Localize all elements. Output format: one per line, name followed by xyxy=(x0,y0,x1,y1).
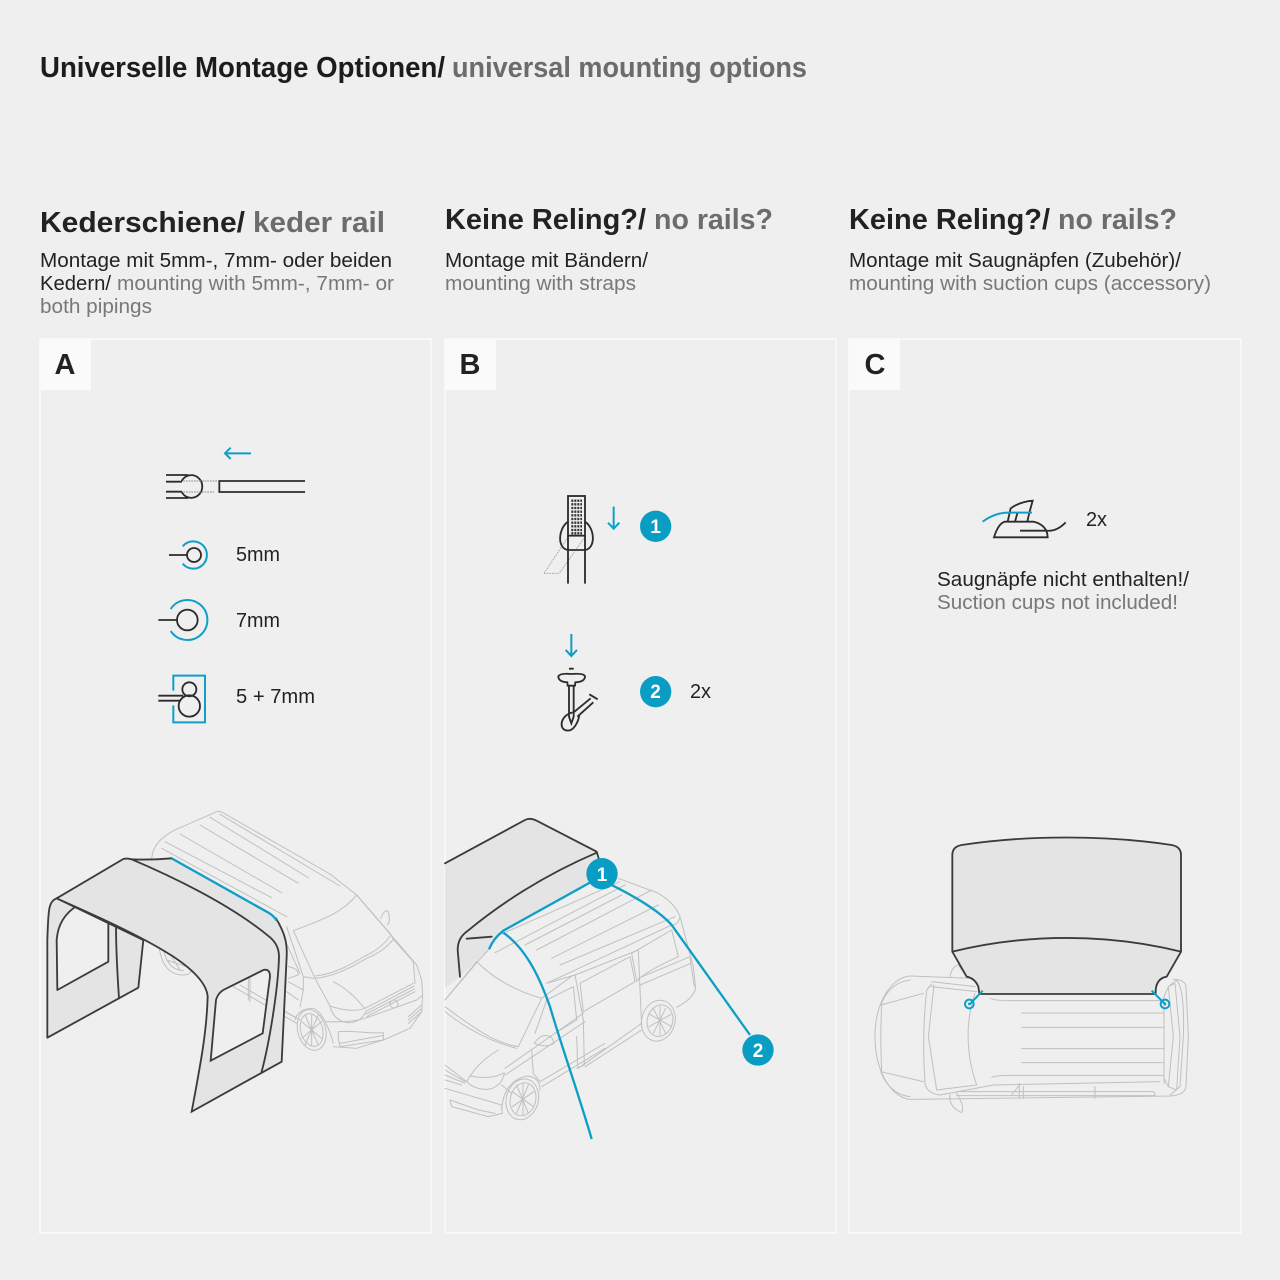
icon: peg xyxy=(558,669,598,731)
illustration: van with awning xyxy=(47,811,423,1112)
text block: keder rail description: Kedern/ xyxy=(40,273,111,295)
badge: 1 xyxy=(586,858,618,889)
text block: suction cups not included: Saugnäpfe nicht enthalten!/ xyxy=(937,569,1189,591)
suction cups xyxy=(965,991,1169,1008)
title: Universelle Montage Optionen/ xyxy=(40,52,445,84)
heading: keder rail xyxy=(40,207,385,239)
heading: keder rail: keder rail xyxy=(253,207,385,239)
badge: 2 xyxy=(640,676,671,707)
icon: strap loop xyxy=(544,496,593,584)
label: 2x pegs: 2x xyxy=(690,681,711,703)
icon: rail xyxy=(166,475,305,498)
panel: C xyxy=(849,339,1241,1233)
blue strap lines xyxy=(489,858,774,1139)
icon: arrow down 2 xyxy=(566,634,577,656)
label: 7mm: 7mm xyxy=(236,610,280,632)
text block: suction cups not included xyxy=(937,569,1189,614)
label: A: A xyxy=(55,349,76,381)
icon: 7mm xyxy=(158,600,207,640)
text block: straps description: Montage mit Bändern/ xyxy=(445,250,648,272)
icons: straps xyxy=(544,496,671,731)
badge: 1 xyxy=(640,511,671,542)
text block: keder rail description: mounting with 5mm-, 7mm- or xyxy=(117,273,394,295)
awning fabric xyxy=(952,837,1181,994)
text block: keder rail description xyxy=(40,250,394,318)
heading: no rails straps xyxy=(445,204,773,236)
heading: no rails suction cups xyxy=(849,204,1177,236)
label: B xyxy=(445,339,496,390)
awning fabric xyxy=(445,819,599,988)
heading: no rails suction cups: no rails? xyxy=(1058,204,1177,236)
heading: keder rail: Kederschiene/ xyxy=(40,207,245,239)
label: C xyxy=(849,339,900,390)
icon: 5mm xyxy=(169,541,207,569)
text block: suction cups not included: Suction cups not included! xyxy=(937,592,1178,614)
van line art xyxy=(875,965,1188,1113)
label: C: C xyxy=(865,349,886,381)
heading: no rails suction cups: Keine Reling?/ xyxy=(849,204,1050,236)
label: 5mm: 5mm xyxy=(236,544,280,566)
van line art xyxy=(152,811,423,1054)
panel: A xyxy=(40,339,431,1233)
badge: 2 xyxy=(742,1034,774,1066)
icons: keder sizes xyxy=(158,448,305,722)
illustration: van from above xyxy=(875,837,1188,1113)
badge number 1: 1 xyxy=(650,517,661,538)
blue keder line xyxy=(172,858,277,921)
text block: suction cups description: mounting with suction cups (accessory) xyxy=(849,273,1211,295)
label: A xyxy=(40,339,91,390)
heading: no rails straps: Keine Reling?/ xyxy=(445,204,646,236)
icon: arrow down 1 xyxy=(608,507,619,529)
text block: suction cups description: Montage mit Saugnäpfen (Zubehör)/ xyxy=(849,250,1181,272)
illustration: van with straps xyxy=(445,819,774,1139)
title: universal mounting options xyxy=(452,52,807,84)
awning fabric xyxy=(47,858,287,1112)
text block: suction cups description xyxy=(849,250,1211,295)
van line art xyxy=(445,878,696,1123)
badge number 2 on van: 2 xyxy=(753,1041,763,1062)
label: 5 + 7mm: 5 + 7mm xyxy=(236,686,315,708)
badge number 2: 2 xyxy=(650,682,661,703)
panel: B xyxy=(445,339,836,1233)
label: 2x suction cups: 2x xyxy=(1086,509,1107,531)
icon: suction cup xyxy=(983,501,1066,537)
text block: straps description xyxy=(445,250,648,295)
text block: keder rail description: both pipings xyxy=(40,296,152,318)
badge number 1 on van: 1 xyxy=(597,865,608,886)
text block: keder rail description: Montage mit 5mm-, 7mm- oder beiden xyxy=(40,250,392,272)
text block: straps description: mounting with straps xyxy=(445,273,636,295)
label: B: B xyxy=(460,349,480,381)
icon: arrow left xyxy=(225,448,251,459)
title xyxy=(40,52,807,84)
heading: no rails straps: no rails? xyxy=(654,204,773,236)
icon: 5 + 7mm xyxy=(158,676,205,722)
